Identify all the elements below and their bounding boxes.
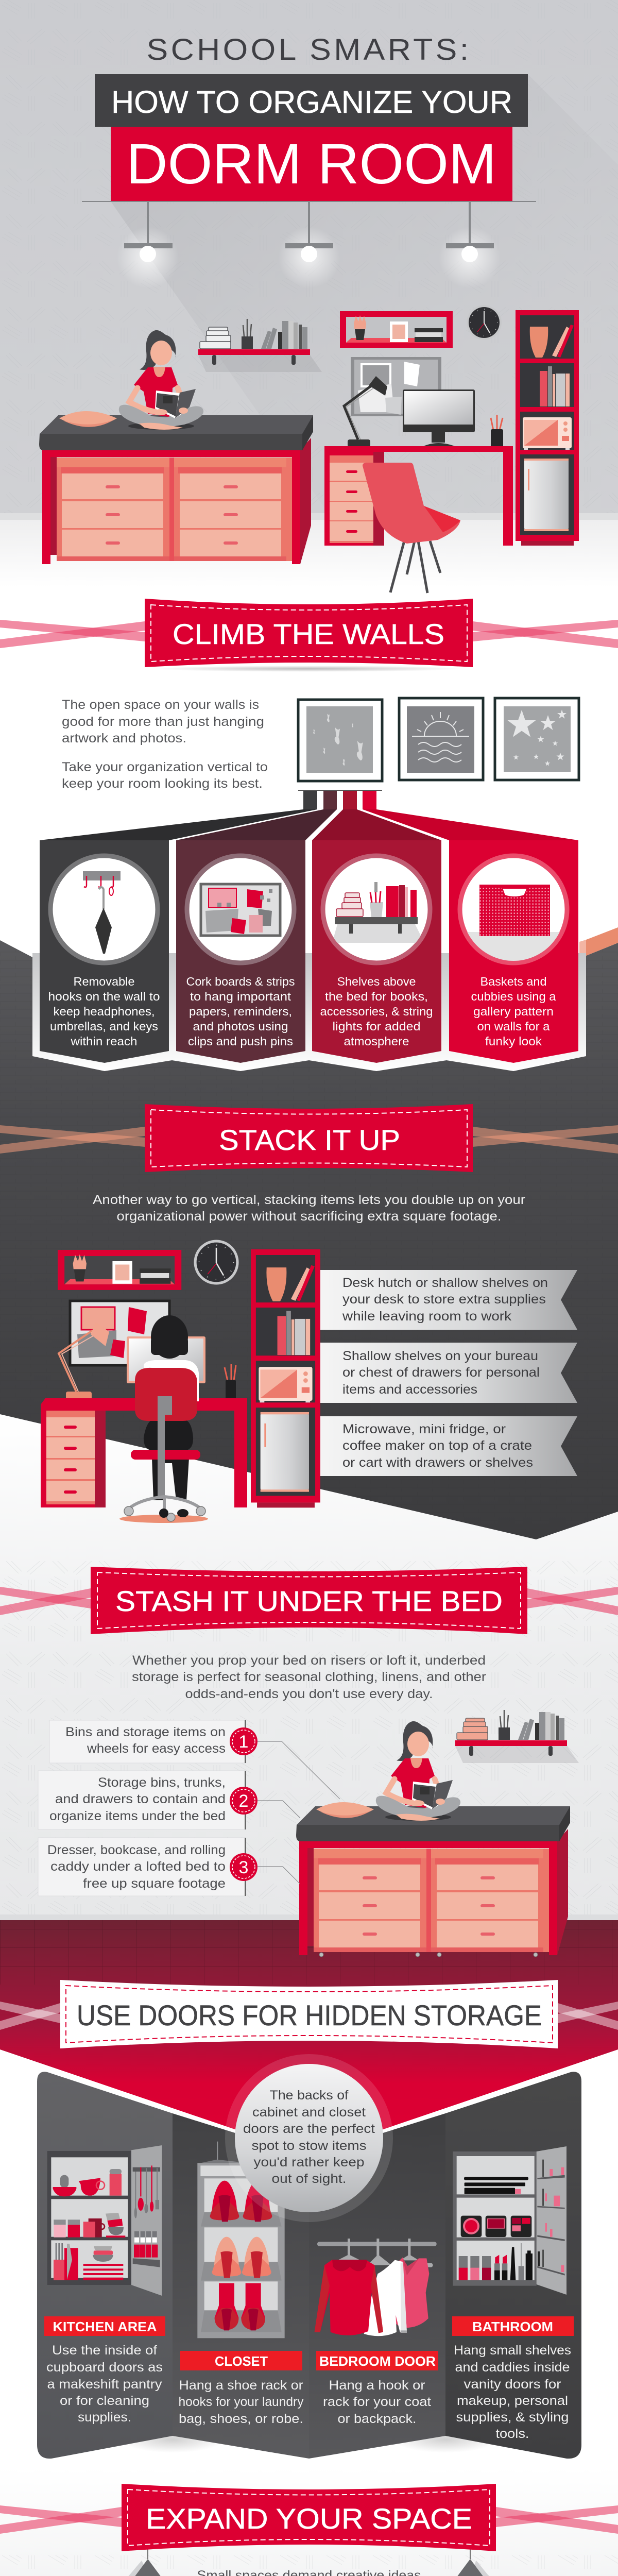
illustration: wall clock — [194, 1240, 239, 1285]
section: expand your space background — [0, 2468, 618, 2576]
panel: shelves above bed — [312, 840, 441, 1063]
banner: use doors for hidden storage: USE DOORS FOR HIDDEN STORAGE — [77, 1999, 542, 2031]
panel: shelves above bed: atmosphere — [344, 1035, 409, 1048]
callout: egg with intro text: doors are the perfect — [243, 2122, 375, 2136]
intro text: climb the walls: artwork and photos. — [62, 731, 186, 745]
illustration: monitor from behind — [127, 1336, 205, 1383]
text: kitchen area — [46, 2343, 163, 2425]
ribbon label: microwave and fridge: coffee maker on top of a crate — [342, 1438, 532, 1453]
callout: egg with intro text: out of sight. — [272, 2172, 346, 2186]
banner: use doors for hidden storage — [60, 1980, 558, 2048]
text: bedroom door: rack for your coat — [323, 2395, 431, 2409]
callout 2: storage bins, trunks: 2 — [239, 1791, 248, 1811]
panel: cork boards: Cork boards & strips — [186, 975, 295, 988]
section: under-the-bed wall background — [0, 1414, 618, 1920]
text: kitchen area: cupboard doors as — [46, 2360, 163, 2375]
framed art: stars — [495, 698, 579, 780]
illustration: desk lamp — [344, 376, 387, 447]
illustration: bookcase with microwave and fridge — [516, 310, 579, 546]
ribbon label: shallow shelves: or chest of drawers for personal — [342, 1365, 540, 1380]
section: dark stack background — [0, 927, 618, 1539]
intro text: stash — [132, 1653, 486, 1701]
callout: egg with intro text: you'd rather keep — [253, 2155, 365, 2170]
callout 2: storage bins, trunks: and drawers to contain and — [55, 1792, 226, 1806]
ribbon label: microwave and fridge: or cart with drawers or shelves — [342, 1455, 533, 1470]
illustration: red chair — [363, 463, 460, 593]
section: red floor background — [0, 1920, 618, 2155]
ribbon label: desk hutch — [320, 1270, 577, 1330]
hero background wall and floor — [0, 0, 618, 587]
pendant lamp left — [113, 2548, 167, 2576]
folding panel: closet — [173, 2113, 309, 2459]
connector roofs — [40, 790, 578, 840]
panel: cork boards: and photos using — [193, 1020, 288, 1033]
framed art: sunset — [399, 698, 483, 780]
panel: baskets and cubbies: on walls for a — [477, 1020, 550, 1033]
ribbons: stack it up — [0, 1125, 618, 1154]
ribbon label: shallow shelves — [320, 1343, 577, 1403]
illustration: bookcase — [251, 1249, 320, 1507]
title bar: how to organize your: HOW TO ORGANIZE YOUR — [111, 84, 512, 120]
label: kitchen area — [44, 2316, 165, 2336]
callout: egg with intro text — [225, 2054, 393, 2222]
banner shadow — [154, 666, 464, 672]
callout: egg with intro text: The backs of — [270, 2088, 349, 2103]
bathroom cabinet illustration — [453, 2146, 566, 2295]
panel: removable hooks: umbrellas, and keys — [50, 1020, 158, 1033]
callout 3: dresser, bookcase: 3 — [239, 1858, 248, 1877]
intro text: stack it up: organizational power without sacrificing extra square footage. — [116, 1209, 502, 1224]
panel: removable hooks: keep headphones, — [54, 1005, 154, 1018]
panel: removable hooks — [40, 840, 169, 1063]
panel: removable hooks: Removable — [73, 975, 135, 988]
intro text: climb the walls: The open space on your walls is — [62, 698, 259, 712]
ribbon label: microwave and fridge: Microwave, mini fridge, or — [342, 1422, 506, 1436]
banner: expand your space: EXPAND YOUR SPACE — [146, 2502, 472, 2535]
text: kitchen area: supplies. — [78, 2410, 131, 2425]
banner: stash it under the bed — [91, 1567, 527, 1634]
label: closet: CLOSET — [215, 2353, 268, 2369]
ribbons: climb the walls — [0, 620, 618, 648]
illustration: red wall frame — [340, 311, 453, 348]
label: bathroom: BATHROOM — [472, 2319, 553, 2334]
text: bedroom door: Hang a hook or — [329, 2378, 425, 2393]
closet shoe rack illustration — [197, 2142, 285, 2338]
callout 3: dresser, bookcase — [38, 1838, 258, 1896]
framed art: music notes — [298, 700, 382, 781]
intro text: climb the walls: keep your room looking its best. — [62, 776, 263, 791]
ribbons: use doors — [0, 2002, 618, 2030]
intro text: climb the walls — [62, 698, 268, 791]
callout 1: bins and storage items: wheels for easy access — [87, 1741, 226, 1756]
ribbon label: shallow shelves: items and accessories — [342, 1382, 477, 1397]
text: kitchen area: a makeshift pantry — [47, 2377, 162, 2392]
text: bedroom door: or backpack. — [338, 2412, 416, 2426]
ribbons: expand your space — [0, 2505, 618, 2534]
banner: climb the walls — [145, 599, 473, 667]
panel: cork boards: to hang important — [190, 990, 291, 1003]
panel: removable hooks: within reach — [70, 1035, 137, 1048]
text: closet: bag, shoes, or robe. — [179, 2412, 303, 2426]
label: bedroom door: BEDROOM DOOR — [319, 2353, 436, 2369]
panel: shelves above bed: the bed for books, — [325, 990, 428, 1003]
illustration: desk lamp — [59, 1322, 109, 1400]
callout: egg with intro text: spot to stow items — [251, 2139, 367, 2153]
callout 3: dresser, bookcase: Dresser, bookcase, and rolling — [47, 1843, 226, 1857]
illustration: desk with drawers — [41, 1398, 247, 1507]
text: bedroom door — [323, 2378, 431, 2426]
panel shadows — [121, 2426, 497, 2453]
track lights — [82, 201, 536, 289]
callout 1: bins and storage items: 1 — [239, 1732, 248, 1752]
ribbon label: shallow shelves: Shallow shelves on your bureau — [342, 1349, 538, 1363]
callout 3: dresser, bookcase: caddy under a lofted bed to — [50, 1859, 226, 1874]
intro text: climb the walls: Take your organization vertical to — [62, 760, 268, 774]
banner: stack it up: STACK IT UP — [219, 1124, 400, 1156]
panel: baskets and cubbies: gallery pattern — [473, 1005, 554, 1018]
panel: shelves above bed: Shelves above — [337, 975, 416, 988]
callout 3: dresser, bookcase: free up square footage — [83, 1876, 226, 1891]
text: bathroom: vanity doors for — [464, 2377, 561, 2392]
callout 2: storage bins, trunks: organize items under the bed — [49, 1809, 226, 1823]
callout connectors — [258, 1741, 340, 1884]
illustration: pencil cup — [225, 1364, 236, 1400]
text: bathroom: Hang small shelves — [454, 2343, 571, 2358]
illustration: wall clock — [467, 305, 502, 340]
ribbon label: desk hutch: while leaving room to work — [342, 1309, 512, 1324]
panel: shelves above bed: lights for added — [333, 1020, 420, 1033]
banner: stack it up — [145, 1104, 473, 1172]
text: bathroom: supplies, & styling — [456, 2410, 569, 2425]
illustration: desk with drawers — [324, 446, 513, 546]
panel: cork boards — [176, 840, 305, 1063]
panel: baskets and cubbies: cubbies using a — [471, 990, 556, 1003]
title bar: dorm room: DORM ROOM — [126, 132, 496, 196]
illustration: bed with storage, girl and shelf — [296, 1710, 579, 1957]
callout 1: bins and storage items — [49, 1720, 258, 1763]
folding panel: kitchen area — [37, 2072, 173, 2459]
callout 1: bins and storage items: Bins and storage items on — [65, 1725, 226, 1739]
panel: cork boards: papers, reminders, — [189, 1005, 292, 1018]
light area behind the four panels — [32, 953, 586, 1071]
title kicker: SCHOOL SMARTS: — [146, 33, 472, 66]
intro text: climb the walls: good for more than just hanging — [62, 715, 264, 729]
panel: baskets and cubbies: Baskets and — [480, 975, 547, 988]
banner: climb the walls: CLIMB THE WALLS — [173, 618, 444, 650]
text: bathroom: tools. — [495, 2427, 529, 2441]
intro text: stack it up — [93, 1193, 525, 1224]
title bar: how to organize your — [95, 74, 528, 127]
intro text: stack it up: Another way to go vertical, stacking items lets you double up on your — [93, 1193, 525, 1207]
label: closet — [180, 2351, 302, 2370]
illustration: cork board — [70, 1301, 169, 1365]
panel: baskets and cubbies — [449, 840, 578, 1063]
illustration: wall shelf with books — [198, 319, 322, 372]
ribbon label: desk hutch: Desk hutch or shallow shelves on — [342, 1276, 548, 1290]
text: closet: Hang a shoe rack or — [179, 2378, 303, 2393]
text: closet — [178, 2378, 304, 2426]
clothes on rod illustration — [315, 2239, 437, 2336]
folding panel: bedroom door — [309, 2113, 445, 2459]
text: bathroom: and caddies inside — [455, 2360, 570, 2375]
illustration: pencil cup — [491, 415, 503, 448]
text: bathroom — [454, 2343, 571, 2441]
callout 2: storage bins, trunks — [38, 1771, 258, 1829]
label: kitchen area: KITCHEN AREA — [53, 2319, 157, 2334]
ribbon label: desk hutch: your desk to store extra supplies — [342, 1292, 546, 1307]
intro text: stash: odds-and-ends you don't use every day. — [185, 1687, 433, 1701]
banner: expand your space — [122, 2484, 496, 2551]
illustration: computer monitor — [403, 389, 475, 447]
text: kitchen area: or for cleaning — [60, 2394, 149, 2408]
panel: baskets and cubbies: funky look — [485, 1035, 542, 1048]
folding panel: bathroom — [445, 2072, 581, 2459]
callout: egg with intro text: cabinet and closet — [252, 2105, 366, 2120]
text: closet: hooks for your laundry — [178, 2395, 304, 2409]
label: bathroom — [452, 2316, 574, 2336]
pendant lamp right — [451, 2548, 505, 2576]
illustration: cork board — [351, 357, 441, 416]
illustration: bed with drawers and girl reading — [39, 330, 313, 564]
text: bathroom: makeup, personal — [457, 2394, 568, 2408]
kitchen cabinet illustration — [47, 2145, 162, 2296]
illustration: girl at desk from behind in chair — [119, 1315, 208, 1523]
ribbons: stash it under the bed — [0, 1587, 618, 1615]
panel: shelves above bed: accessories, & string — [320, 1005, 433, 1018]
panel: removable hooks: hooks on the wall to — [48, 990, 160, 1003]
intro text: stash: Whether you prop your bed on risers or loft it, underbed — [132, 1653, 486, 1668]
callout 2: storage bins, trunks: Storage bins, trunks, — [98, 1775, 226, 1790]
banner: stash it under the bed: STASH IT UNDER THE BED — [115, 1585, 503, 1617]
intro text: stash: storage is perfect for seasonal clothing, linens, and other — [132, 1670, 486, 1684]
ribbon label: microwave and fridge — [320, 1416, 577, 1476]
panel: cork boards: clips and push pins — [188, 1035, 293, 1048]
text: kitchen area: Use the inside of — [52, 2343, 157, 2358]
illustration: red wall frame — [58, 1250, 181, 1290]
